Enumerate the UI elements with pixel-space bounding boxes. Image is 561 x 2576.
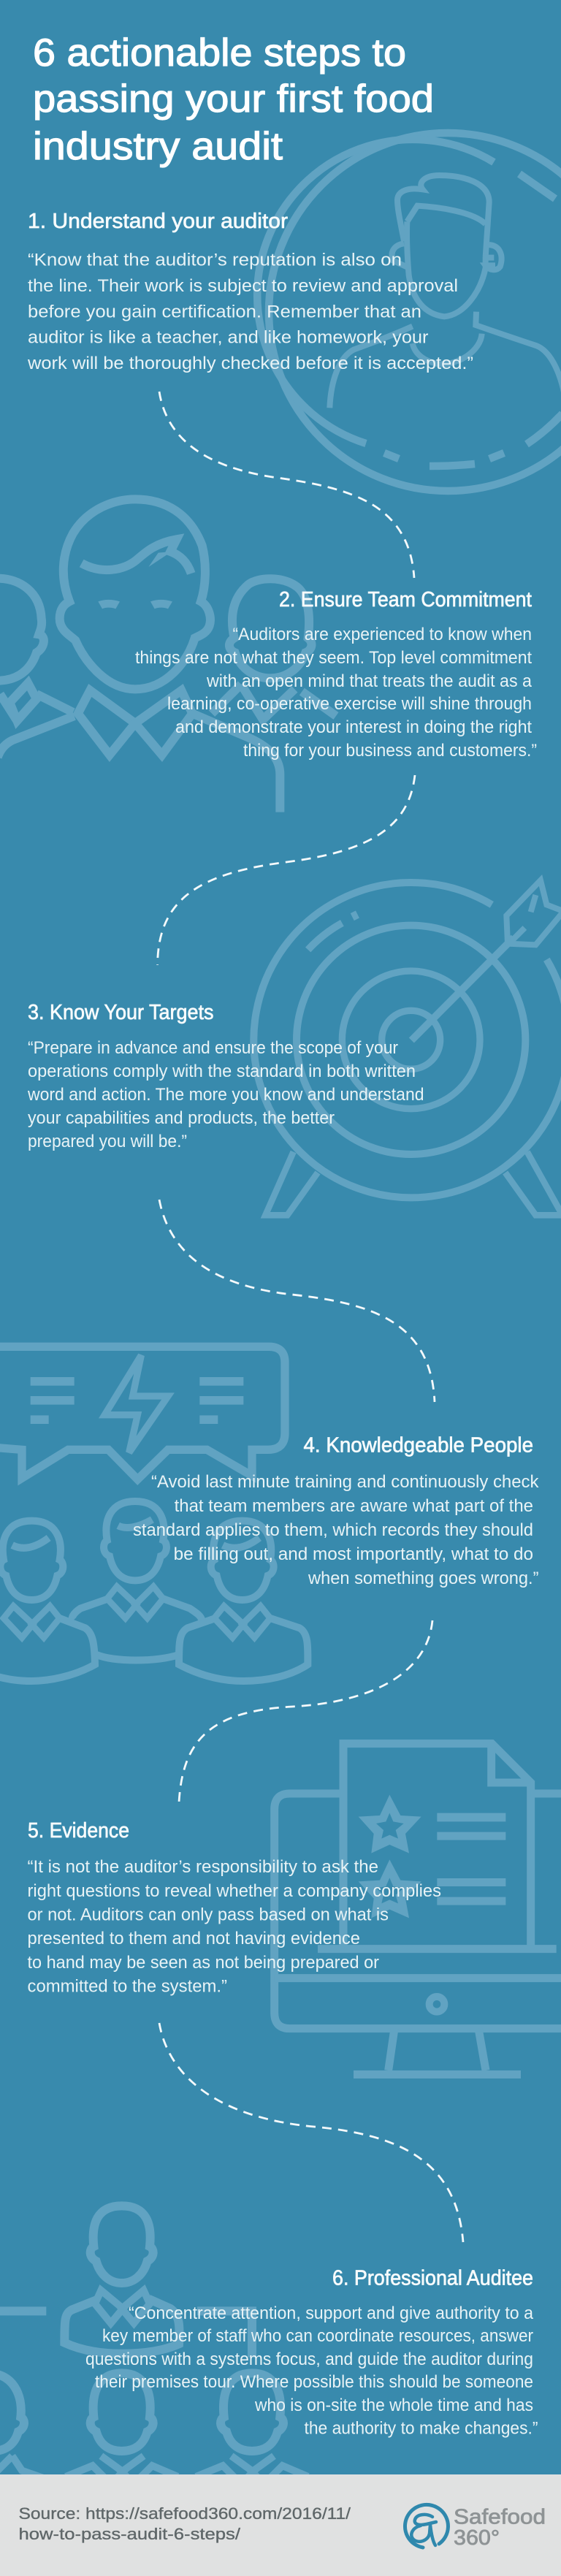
text block: step 2: things are not what they seem. Top level commitment — [135, 648, 532, 668]
icon: target with arrow — [253, 880, 561, 1215]
text block: step 6: who is on-site the whole time and has — [254, 2396, 533, 2415]
text block: step 3: operations comply with the standard in both written — [28, 1062, 416, 1081]
text block: step 3: your capabilities and products, the better — [28, 1108, 335, 1128]
text block: step 4: when something goes wrong.” — [308, 1569, 539, 1588]
heading: step 1: 1. Understand your auditor — [28, 210, 288, 233]
icon: auditor in magnifier ring — [257, 133, 561, 491]
text block: step 1 — [27, 250, 473, 373]
icon: organisation chart of people — [0, 2206, 308, 2484]
logo wordmark — [454, 2506, 546, 2550]
title: passing your first food — [33, 77, 434, 121]
text block: step 2: “Auditors are experienced to know when — [232, 625, 532, 644]
text block: step 4: “Avoid last minute training and continuously check — [151, 1472, 539, 1492]
heading: step 3: 3. Know Your Targets — [28, 1001, 213, 1024]
text block: step 3 — [27, 1038, 424, 1151]
text block: step 1: “Know that the auditor’s reputation is also on — [28, 250, 402, 270]
text block: step 3: “Prepare in advance and ensure the scope of your — [28, 1038, 398, 1058]
text block: step 2: learning, co-operative exercise will shine through — [167, 694, 532, 714]
text block: step 5 — [28, 1857, 441, 1996]
arrow: dashed path step 2 to 3 — [158, 775, 415, 965]
source text — [19, 2504, 351, 2543]
icon: speech bubble with lightning and three people — [0, 1346, 308, 1681]
text block: step 5: “It is not the auditor’s responsibility to ask the — [28, 1857, 378, 1877]
text block: step 2: with an open mind that treats the audit as a — [206, 671, 533, 691]
text block: step 3: prepared you will be.” — [28, 1132, 187, 1151]
text block: step 5: presented to them and not having evidence — [28, 1929, 360, 1948]
text block: step 6: the authority to make changes.” — [304, 2418, 538, 2439]
text block: step 2: and demonstrate your interest in doing the right — [175, 717, 532, 737]
arrow: dashed path step 3 to 4 — [159, 1200, 435, 1402]
logo wordmark: Safefood — [454, 2506, 546, 2529]
text block: step 6: key member of staff who can coordinate resources, answer — [102, 2326, 533, 2346]
text block: step 6: “Concentrate attention, support and give authority to a — [129, 2303, 534, 2323]
text block: step 6 — [85, 2303, 538, 2439]
icon: team of three people — [0, 499, 336, 812]
heading: step 2: 2. Ensure Team Commitment — [279, 588, 532, 611]
heading: step 6: 6. Professional Auditee — [332, 2266, 533, 2290]
title: 6 actionable steps to — [33, 31, 406, 75]
icon: Safefood 360 logo mark — [405, 2504, 448, 2548]
text block: step 3: word and action. The more you know and understand — [27, 1085, 424, 1105]
text block: step 6: their premises tour. Where possible this should be someone — [95, 2372, 533, 2392]
title: industry audit — [33, 125, 283, 168]
arrow: dashed path step 5 to 6 — [159, 2023, 463, 2242]
icon: document on computer monitor — [275, 1744, 561, 2078]
text block: step 5: to hand may be seen as not being prepared or — [28, 1953, 379, 1973]
heading: step 5: 5. Evidence — [28, 1819, 129, 1843]
source text: how-to-pass-audit-6-steps/ — [19, 2525, 241, 2543]
arrow: dashed path step 1 to 2 — [159, 392, 414, 578]
text block: step 2: thing for your business and customers.” — [243, 741, 537, 761]
text block: step 4: be filling out, and most importantly, what to do — [174, 1544, 533, 1564]
text block: step 6: questions with a systems focus, and guide the auditor during — [85, 2350, 533, 2369]
text block: step 4: standard applies to them, which records they should — [133, 1520, 533, 1540]
text block: step 2 — [135, 625, 537, 761]
text block: step 1: work will be thoroughly checked before it is accepted.” — [27, 354, 473, 373]
text block: step 1: before you gain certification. Remember that an — [28, 302, 421, 321]
text block: step 1: auditor is like a teacher, and like homework, your — [28, 327, 428, 348]
text block: step 5: right questions to reveal whether a company complies — [28, 1881, 441, 1901]
text block: step 4: that team members are aware what part of the — [175, 1496, 533, 1516]
text block: step 4 — [133, 1472, 539, 1588]
arrow: dashed path step 4 to 5 — [179, 1620, 432, 1802]
source text: Source: https://safefood360.com/2016/11/ — [19, 2504, 351, 2523]
panel: footer — [0, 2474, 561, 2576]
text block: step 1: the line. Their work is subject to review and approval — [28, 276, 458, 296]
heading: step 4: 4. Knowledgeable People — [304, 1433, 533, 1457]
title — [33, 31, 434, 168]
text block: step 5: or not. Auditors can only pass based on what is — [28, 1905, 389, 1924]
logo wordmark: 360° — [454, 2526, 500, 2550]
text block: step 5: committed to the system.” — [28, 1977, 227, 1996]
